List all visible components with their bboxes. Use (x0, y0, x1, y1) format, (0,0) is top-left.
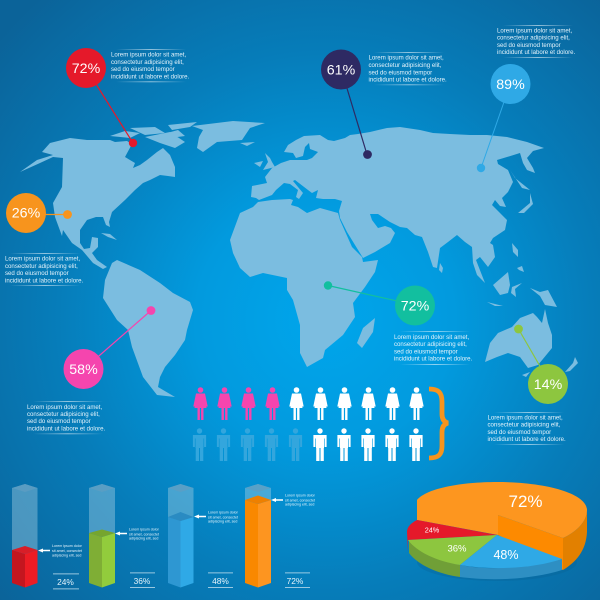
pie: green side (409, 540, 460, 577)
pie labels: 72% (508, 492, 543, 511)
bar chart: orange 72%: 72% (287, 576, 304, 586)
callout: light blue 89% (477, 64, 530, 172)
callout: navy 61% (321, 50, 372, 159)
text block: red callout: Lorem ipsum dolor sit amet, (111, 52, 186, 58)
map: cuba (101, 233, 117, 240)
callout: light blue 89%: 89% (496, 77, 525, 93)
pie: shadow (417, 543, 577, 581)
text block: orange callout: sed do eiusmod tempor (5, 270, 69, 277)
text block: navy callout: incididunt ut labore et dolore. (368, 76, 447, 84)
text block: pink callout: consectetur adipisicing elit, (27, 411, 100, 418)
text block: orange callout: incididunt ut labore et dolore. (5, 277, 84, 284)
map: north america (20, 138, 175, 269)
bar chart: red 24%: adipiscing elit, sed (52, 554, 81, 558)
text block: orange callout: Lorem ipsum dolor sit amet, (5, 256, 80, 262)
pie: green slice (408, 535, 497, 565)
text block: green callout (488, 412, 566, 445)
text block: teal callout: consectetur adipisicing elit, (394, 341, 467, 348)
text block: red callout: sed do eiusmod tempor (111, 66, 175, 73)
pie chart: 24% (425, 526, 440, 534)
pie chart: 36% (447, 544, 467, 554)
map: tasmania and new zealand (522, 357, 578, 377)
bar chart: blue 48% (168, 484, 239, 588)
callout: teal 72% (324, 281, 435, 326)
callout: green 14% (514, 325, 568, 404)
text block: orange callout (5, 253, 84, 286)
bar chart: orange 72%: sit amet, consectet (285, 498, 315, 502)
text block: light blue callout: consectetur adipisicing elit, (497, 35, 570, 42)
bar chart: blue 48%: adipiscing elit, sed (208, 520, 237, 524)
callout: orange 26%: 26% (12, 206, 41, 222)
text block: light blue callout: Lorem ipsum dolor sit amet, (497, 27, 572, 34)
map: arctic islands (110, 122, 197, 148)
text block: navy callout: consectetur adipisicing elit, (368, 62, 442, 69)
text block: green callout: incididunt ut labore et dolore. (488, 436, 566, 443)
text block: orange callout: consectetur adipisicing elit, (5, 263, 78, 270)
bar chart: green 36%: adipiscing elit, sed (129, 536, 158, 540)
map: australia (485, 309, 552, 368)
text block: navy callout: sed do eiusmod tempor (368, 69, 432, 76)
text block: green callout: consectetur adipisicing elit, (488, 422, 561, 428)
pie: blue side (460, 559, 562, 579)
text block: light blue callout: incididunt ut labore et dolore. (497, 49, 576, 56)
callout: red 72% (66, 48, 137, 147)
text block: teal callout: Lorem ipsum dolor sit amet, (394, 334, 469, 341)
text block: red callout: incididunt ut labore et dolore. (111, 73, 190, 80)
callout: pink 58% (64, 306, 155, 389)
pictogram: women row (193, 387, 424, 420)
text block: pink callout: Lorem ipsum dolor sit amet, (27, 404, 102, 411)
text block: teal callout: sed do eiusmod tempor (394, 348, 458, 355)
text block: pink callout: sed do eiusmod tempor (27, 418, 91, 425)
bar chart: orange 72%: adipiscing elit, sed (285, 502, 314, 506)
bar chart: red 24% (12, 484, 83, 589)
pie chart: 48% (493, 548, 519, 562)
pie chart (407, 482, 587, 581)
map: madagascar (357, 318, 375, 348)
bar chart: green 36%: 36% (134, 576, 151, 586)
callout: orange 26% (6, 193, 72, 233)
text block: light blue callout (497, 25, 576, 58)
text block: red callout (111, 49, 190, 82)
callout: red 72%: 72% (72, 61, 101, 77)
map: africa (230, 199, 378, 367)
map: south america (103, 260, 193, 397)
text block: green callout: sed do eiusmod tempor (488, 429, 551, 436)
pie: top of orange slice (417, 482, 587, 538)
callout: teal 72%: 72% (401, 298, 430, 314)
text block: red callout: consectetur adipisicing elit, (111, 59, 184, 66)
bar chart: orange 72% (245, 484, 316, 588)
text block: navy callout: Lorem ipsum dolor sit amet, (368, 55, 444, 62)
orange brace (429, 389, 448, 458)
text block: navy callout (368, 52, 447, 85)
bar chart: blue 48%: Lorem ipsum dolor (208, 510, 239, 514)
pie: red slice (407, 520, 497, 552)
pie: blue slice (460, 535, 562, 568)
bar chart: red 24%: Lorem ipsum dolor (52, 544, 83, 548)
pie: cut face of orange slice (498, 515, 563, 570)
bar chart: blue 48%: 48% (212, 576, 229, 586)
text block: green callout: Lorem ipsum dolor sit amet, (488, 414, 563, 421)
bar chart: blue 48%: sit amet, consectet (208, 515, 238, 519)
text block: pink callout (27, 401, 106, 434)
text block: teal callout: incididunt ut labore et dolore. (394, 356, 473, 362)
bar chart: green 36%: Lorem ipsum dolor (129, 528, 160, 532)
pictogram: men row (193, 428, 423, 461)
bar chart: red 24%: sit amet, consectet (52, 549, 82, 553)
text block: light blue callout: sed do eiusmod tempor (497, 42, 561, 49)
map: greenland (192, 121, 265, 152)
map: asia islands (439, 170, 557, 307)
bar chart: orange 72%: Lorem ipsum dolor (285, 494, 316, 498)
callout: pink 58%: 58% (69, 362, 98, 378)
callout: green 14%: 14% (534, 377, 563, 393)
text block: teal callout (394, 331, 473, 365)
map: iceland and british isles (240, 142, 275, 170)
bar chart: green 36%: sit amet, consectet (129, 532, 159, 536)
text block: pink callout: incididunt ut labore et dolore. (27, 426, 106, 432)
bar chart: red 24%: 24% (57, 577, 74, 587)
map: eurasia (251, 127, 544, 283)
callout: navy 61%: 61% (327, 62, 356, 78)
world map (20, 121, 578, 397)
pie: outer side of orange slice (563, 510, 587, 570)
bar chart: green 36% (89, 484, 160, 588)
